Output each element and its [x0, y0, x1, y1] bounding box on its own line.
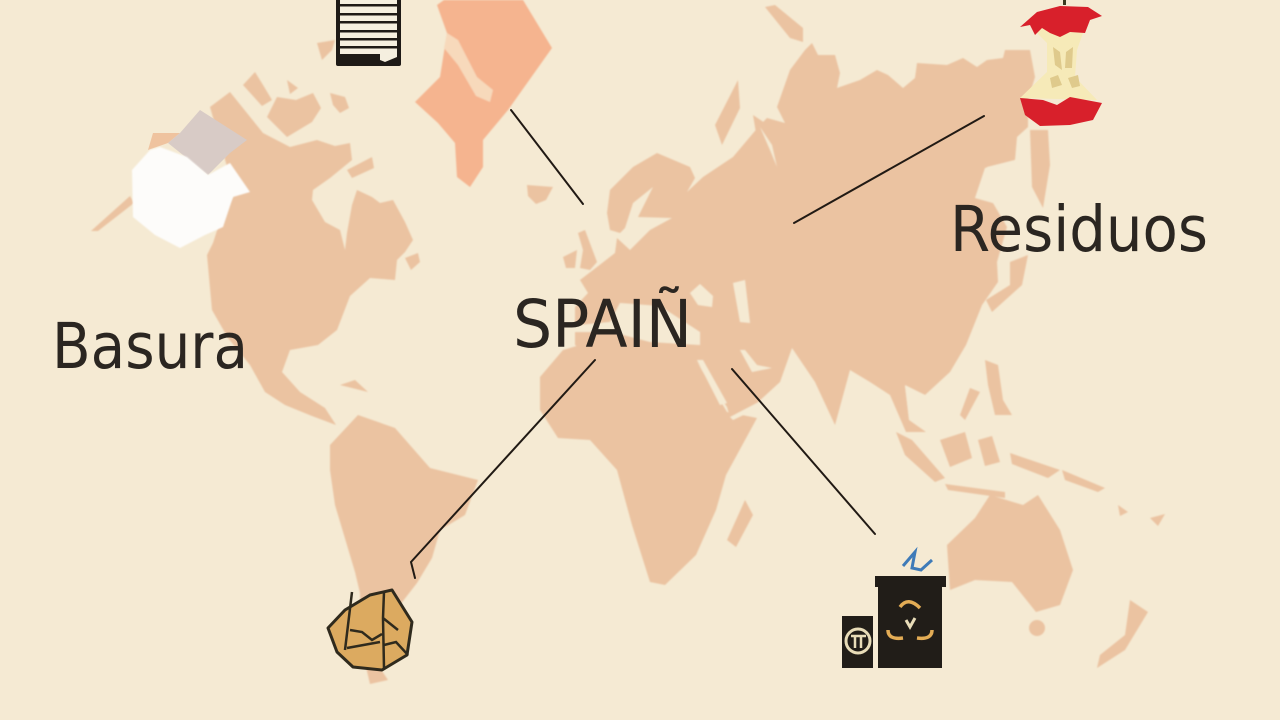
label: Residuos: Residuos: [950, 193, 1208, 266]
line: to recycling bins icon: [732, 369, 875, 534]
line: to apple core icon: [794, 116, 984, 223]
landmass: Australia and New Zealand: [947, 495, 1148, 668]
landmass: Africa: [540, 340, 757, 585]
landmass: United Kingdom and Ireland: [563, 230, 597, 270]
landmass: Asian islands: [715, 5, 1165, 526]
landmass: South America: [330, 415, 478, 684]
icon: newspaper sheet: [336, 0, 401, 66]
line: to crumpled paper icon: [411, 360, 595, 578]
label: Basura: Basura: [52, 310, 248, 383]
world map: [91, 0, 1165, 684]
landmass: Greenland: [415, 0, 552, 187]
landmass: North America: [91, 40, 420, 425]
landmass: Eurasia: [575, 43, 1035, 432]
icon: apple core: [1020, 0, 1102, 126]
icon: crumpled paper ball: [328, 590, 412, 670]
line: to paper icon: [511, 110, 583, 204]
landmass: Iceland: [527, 185, 553, 204]
seas inside Eurasia and Africa: [568, 127, 1018, 420]
icon: recycling bins: [842, 552, 946, 668]
landmass: Madagascar: [727, 500, 753, 547]
label: SPAIÑ: SPAIÑ: [513, 286, 692, 363]
connector lines: [411, 110, 984, 578]
icon: paper tissue ball: [132, 110, 250, 248]
